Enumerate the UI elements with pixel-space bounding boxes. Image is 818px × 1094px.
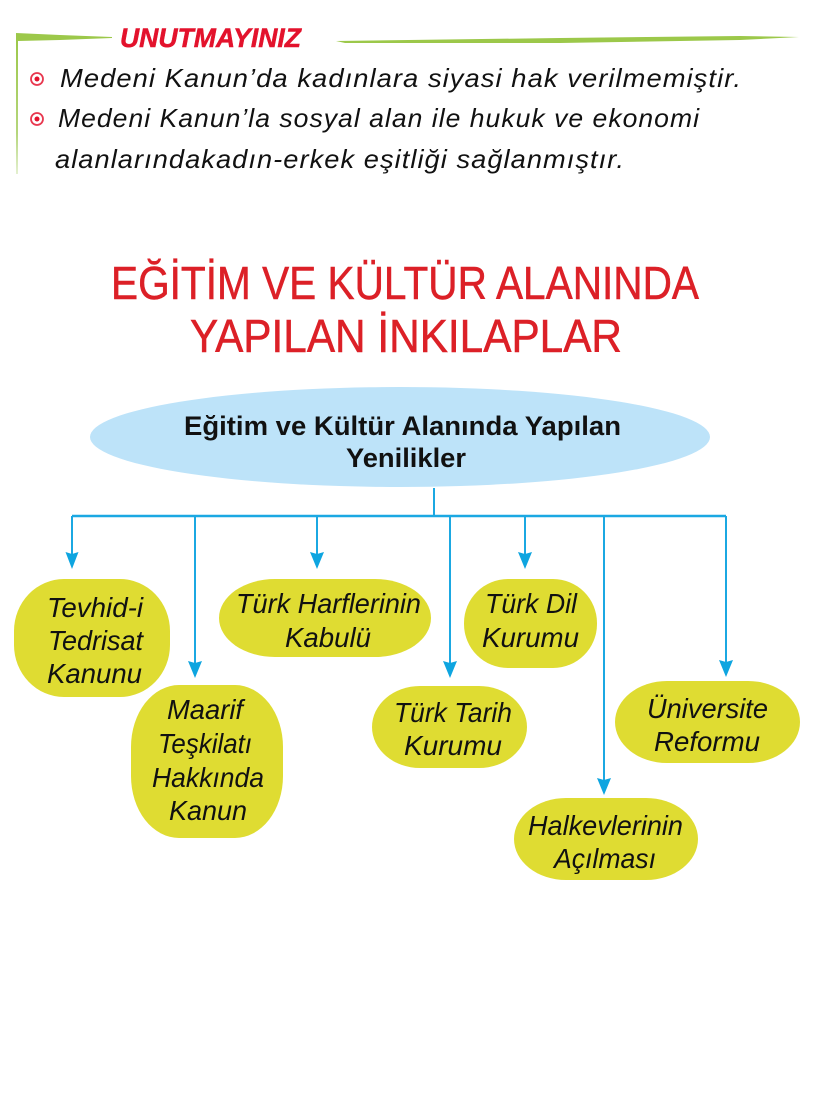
reminder frame: green brush lines	[16, 33, 799, 174]
node: Üniversite Reformu: Üniversite	[647, 693, 768, 724]
node: Maarif Teşkilatı Hakkında Kanun: Maarif	[167, 694, 246, 725]
node: Türk Tarih Kurumu: Kurumu	[404, 730, 502, 761]
diagram heading ellipse: Eğitim ve Kültür Alanında Yapılan	[184, 411, 621, 441]
node: Tevhid-i Tedrisat Kanunu: Tevhid-i	[47, 592, 144, 623]
node: Maarif Teşkilatı Hakkında Kanun	[131, 685, 283, 838]
node: Türk Harflerinin Kabulü: Türk Harflerinin	[236, 588, 421, 619]
node: Türk Tarih Kurumu	[372, 686, 527, 768]
connector lines and arrows	[66, 488, 733, 795]
node: Üniversite Reformu	[615, 681, 800, 763]
diagram heading ellipse	[90, 387, 710, 487]
title: YAPILAN İNKILAPLAR	[190, 310, 622, 362]
title: EĞİTİM VE KÜLTÜR ALANINDA	[111, 257, 699, 309]
diagram heading ellipse: Yenilikler	[346, 443, 466, 473]
reminder text 1: Medeni Kanun’da kadınlara siyasi hak verilmemiştir.	[60, 63, 742, 93]
node: Halkevlerinin Açılması: Açılması	[552, 843, 656, 874]
node: Tevhid-i Tedrisat Kanunu: Kanunu	[47, 658, 142, 689]
node: Maarif Teşkilatı Hakkında Kanun: Teşkilatı	[158, 728, 252, 759]
node: Halkevlerinin Açılması	[514, 798, 698, 880]
node: Üniversite Reformu: Reformu	[654, 726, 760, 757]
node: Maarif Teşkilatı Hakkında Kanun: Kanun	[169, 795, 247, 826]
panel: reminder	[16, 23, 799, 174]
node: Türk Harflerinin Kabulü	[219, 579, 431, 657]
node: Tevhid-i Tedrisat Kanunu: Tedrisat	[48, 625, 144, 656]
node: Türk Harflerinin Kabulü: Kabulü	[285, 622, 371, 653]
node: Türk Dil Kurumu	[464, 579, 597, 668]
reminder heading: UNUTMAYINIZ	[120, 23, 302, 53]
node: Halkevlerinin Açılması: Halkevlerinin	[528, 810, 683, 841]
reminder text 3: alanlarındakadın-erkek eşitliği sağlanmıştır.	[55, 144, 625, 174]
node: Türk Dil Kurumu: Kurumu	[482, 622, 579, 653]
bullet 1	[31, 73, 43, 85]
title	[111, 257, 699, 362]
node: Türk Tarih Kurumu: Türk Tarih	[394, 697, 512, 728]
node: Maarif Teşkilatı Hakkında Kanun: Hakkında	[152, 762, 264, 793]
bullet 2	[31, 113, 43, 125]
node: Tevhid-i Tedrisat Kanunu	[14, 579, 170, 697]
reminder text 2: Medeni Kanun’la sosyal alan ile hukuk ve ekonomi	[58, 103, 700, 133]
node: Türk Dil Kurumu: Türk Dil	[485, 588, 578, 619]
